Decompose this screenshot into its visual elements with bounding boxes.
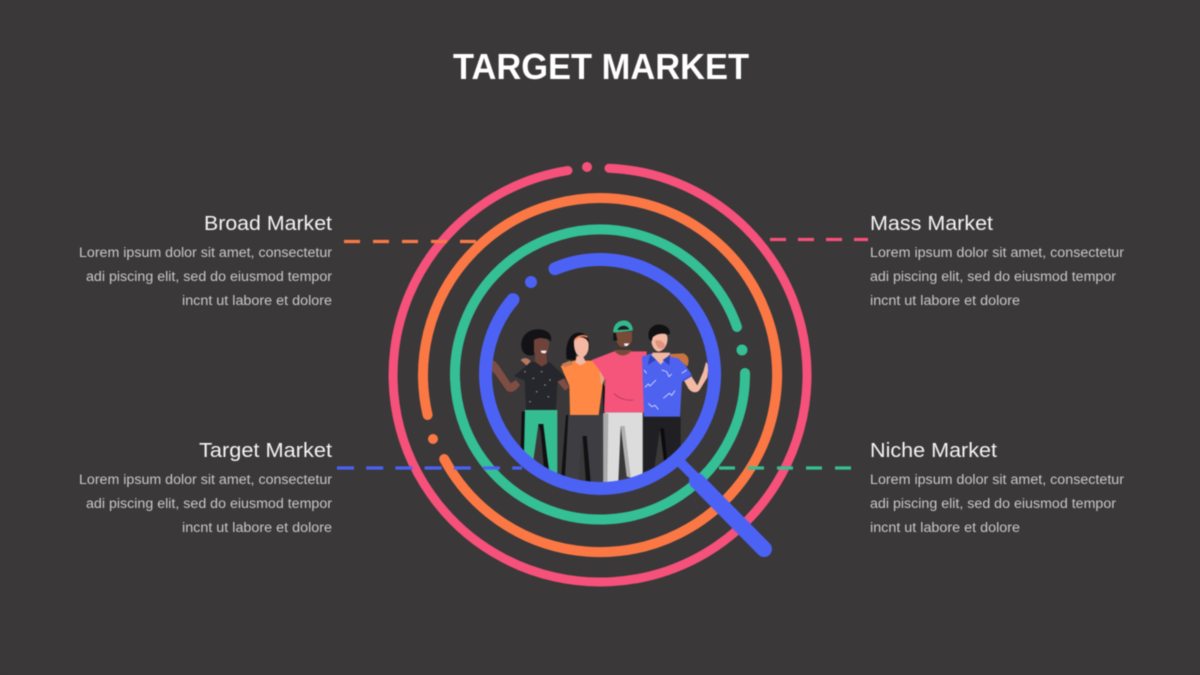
heading: target market: Target Market	[199, 440, 332, 462]
text block: mass market description: adi piscing elit, sed do eiusmod tempor	[870, 269, 1117, 284]
dashed connector: target market	[337, 466, 522, 470]
lens ring (target market, blue)	[486, 259, 715, 488]
ring: mass market (orange)	[423, 198, 777, 552]
person 1	[491, 329, 569, 474]
dashed connector: broad market	[344, 240, 477, 243]
panel: target market	[79, 440, 333, 535]
panel: niche market	[870, 440, 1125, 535]
text block: target market description: Lorem ipsum dolor sit amet, consectetur	[79, 472, 333, 487]
person 2	[561, 333, 605, 483]
text block: mass market description: incnt ut labore et dolore	[870, 293, 1020, 308]
text block: target market description	[79, 472, 333, 535]
text block: broad market description	[79, 245, 333, 308]
heading: broad market: Broad Market	[204, 213, 332, 235]
panel: mass market	[870, 213, 1125, 308]
text block: target market description: adi piscing elit, sed do eiusmod tempor	[86, 496, 333, 511]
text block: mass market description: Lorem ipsum dolor sit amet, consectetur	[870, 245, 1125, 260]
illustration: group of four people	[491, 320, 709, 483]
person 3	[592, 320, 647, 482]
magnifier handle	[678, 460, 764, 549]
person 4	[642, 325, 709, 472]
text block: mass market description	[870, 245, 1125, 308]
heading: niche market: Niche Market	[870, 440, 997, 462]
text block: niche market description: adi piscing elit, sed do eiusmod tempor	[870, 496, 1117, 511]
text block: broad market description: Lorem ipsum dolor sit amet, consectetur	[79, 245, 333, 260]
title: TARGET MARKET	[453, 46, 749, 87]
dashed connector: mass market	[770, 238, 868, 241]
text block: niche market description: Lorem ipsum dolor sit amet, consectetur	[870, 472, 1125, 487]
text block: target market description: incnt ut labore et dolore	[182, 520, 332, 535]
ring: niche market (green)	[455, 230, 748, 520]
ring: broad market (pink)	[393, 162, 807, 582]
text block: broad market description: adi piscing elit, sed do eiusmod tempor	[86, 269, 333, 284]
dashed connector: niche market	[719, 466, 852, 470]
text block: niche market description: incnt ut labore et dolore	[870, 520, 1020, 535]
panel: broad market	[79, 213, 333, 308]
text block: broad market description: incnt ut labore et dolore	[182, 293, 332, 308]
text block: niche market description	[870, 472, 1125, 535]
heading: mass market: Mass Market	[870, 213, 993, 235]
magnifying glass	[486, 259, 764, 549]
